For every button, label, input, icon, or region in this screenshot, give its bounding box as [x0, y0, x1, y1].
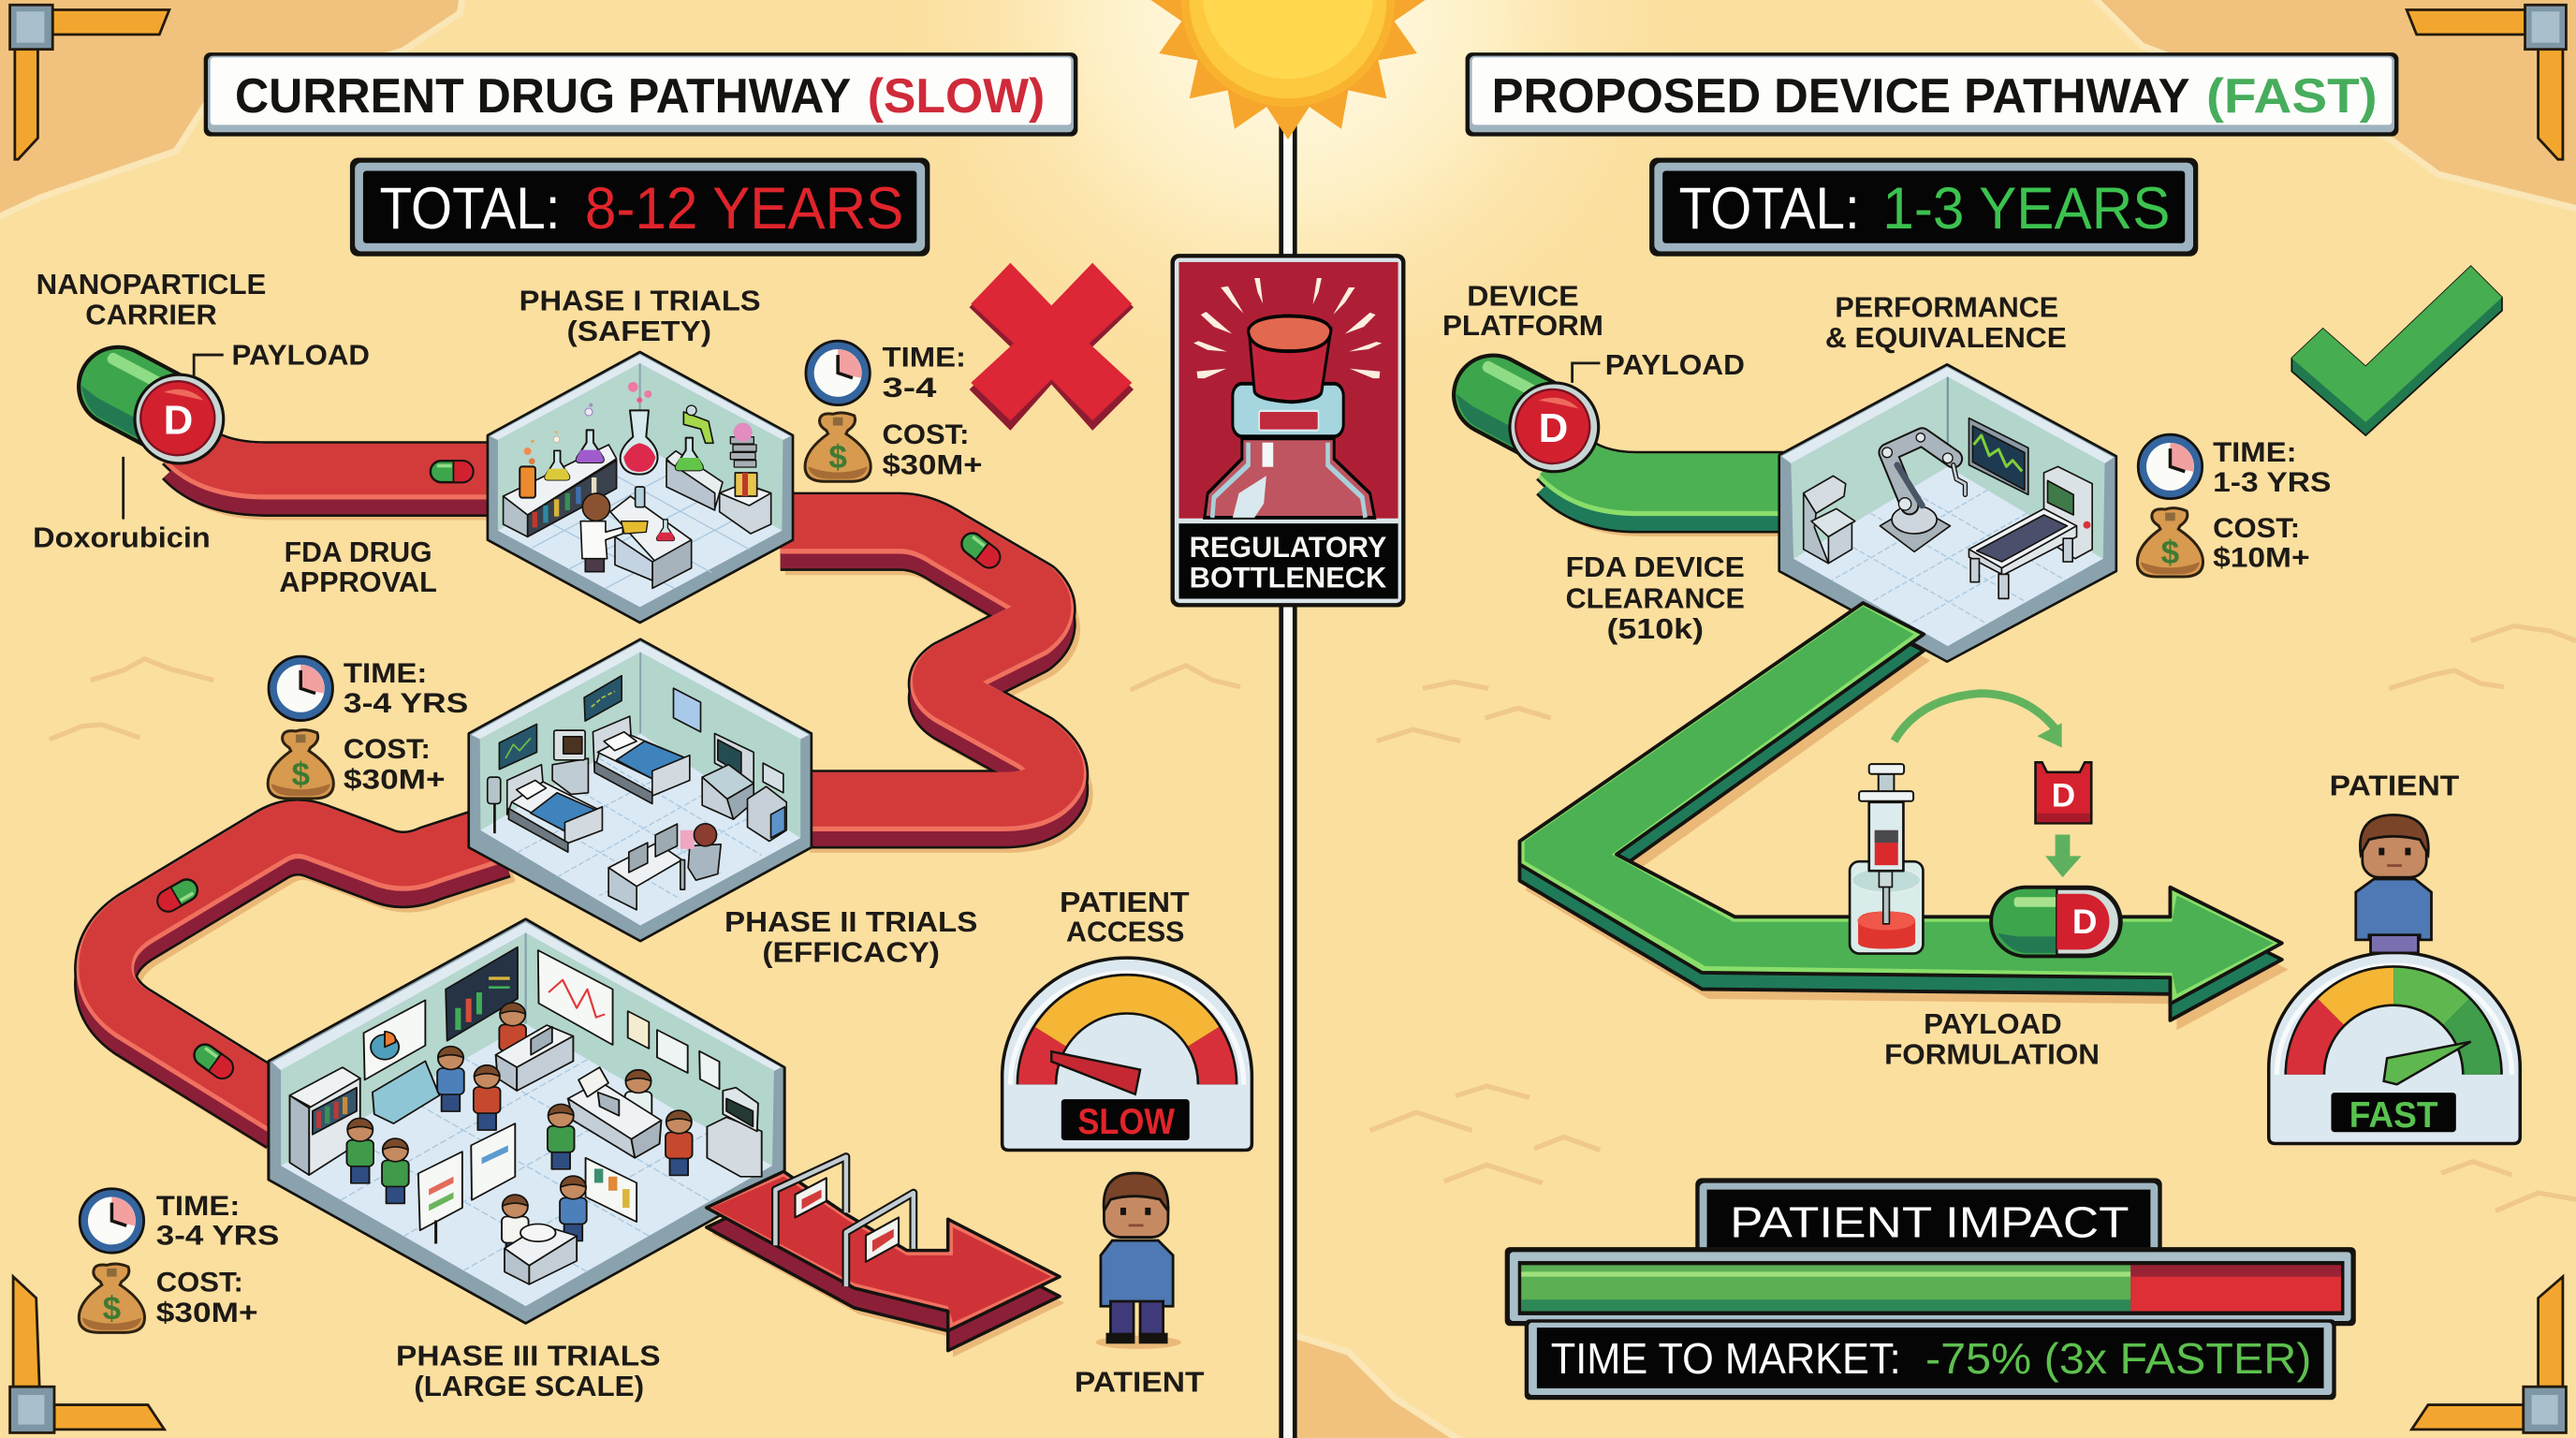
icon: money bag: $ — [103, 1290, 122, 1327]
red pathway track, drug approval to phase I — [184, 441, 501, 492]
icon: money bag — [2137, 508, 2203, 577]
text: total label: TOTAL: — [1679, 176, 1860, 242]
readout: time to market: -75% (3x FASTER) — [1925, 1334, 2311, 1383]
icon: money bag — [268, 730, 333, 799]
label: performance and equivalence: PERFORMANCE — [1835, 291, 2058, 324]
icon: red cross — [970, 263, 1134, 431]
text: cost: COST: — [344, 734, 431, 765]
label: patient left: PATIENT — [1075, 1366, 1205, 1399]
icon: device capsule — [1438, 337, 1614, 487]
text: 8-12 years: 8-12 YEARS — [585, 176, 903, 242]
heading: fast: (FAST) — [2206, 68, 2378, 123]
panel: total drug years — [350, 157, 929, 257]
text: cost: $30M+ — [883, 449, 983, 480]
icon: corner bracket bottom left — [10, 1277, 165, 1432]
stat block: device time and cost — [2137, 434, 2331, 577]
label: payload: PAYLOAD — [232, 339, 370, 372]
label: patient access: ACCESS — [1066, 916, 1184, 948]
text: time — [883, 342, 966, 404]
icon: clock — [80, 1189, 144, 1253]
text: time: TIME: — [883, 342, 966, 373]
icon: patient left — [1096, 1173, 1181, 1349]
readout: time to market — [1525, 1319, 2336, 1400]
panel: lab performance and equivalence — [1779, 364, 2116, 662]
background: sand ripples — [50, 626, 2576, 1211]
panel: patient impact — [1505, 1178, 2356, 1400]
label: payload formulation: PAYLOAD — [1924, 1007, 2062, 1040]
gauge readout: slow: SLOW — [1077, 1102, 1175, 1142]
icon: gate one — [775, 1157, 846, 1245]
label: patient access: PATIENT — [1060, 886, 1190, 918]
icon: clock — [806, 341, 870, 405]
label: performance and equivalence: & EQUIVALENCE — [1825, 321, 2067, 354]
text: time — [2213, 437, 2331, 498]
text: D: D — [2052, 778, 2075, 814]
label: phase II trials: (EFFICACY) — [762, 936, 940, 969]
text: D: D — [2072, 902, 2097, 941]
label: phase I trials: (SAFETY) — [567, 315, 711, 347]
icon: gate two — [846, 1193, 914, 1286]
icon: green check — [2291, 266, 2502, 435]
mini capsules on red track — [154, 461, 1004, 1082]
gauge needle — [1051, 1051, 1140, 1094]
gauge readout: fast: FAST — [2349, 1095, 2438, 1136]
panel: lab phase I trials — [488, 352, 793, 623]
gauge needle — [2384, 1042, 2471, 1084]
gauge: patient access fast — [2269, 952, 2520, 1143]
label: performance and equivalence — [1825, 291, 2067, 354]
text: 1-3 years: 1-3 YEARS — [1882, 176, 2170, 242]
label: payload formulation: FORMULATION — [1884, 1037, 2100, 1070]
stat block: phase I time and cost — [805, 341, 983, 481]
label: fda drug approval — [279, 536, 437, 598]
text: time: TIME: — [344, 658, 427, 689]
text: cost — [2213, 513, 2310, 573]
label: device platform — [1442, 279, 1603, 342]
icon: green arc arrow — [1895, 694, 2062, 748]
label: fda device clearance: FDA DEVICE — [1566, 550, 1745, 583]
icon: money bag: $ — [828, 439, 847, 476]
panel: regulatory bottleneck sign — [1171, 254, 1405, 607]
text: D: D — [1539, 405, 1568, 451]
icon: patient right — [2356, 814, 2431, 953]
icon: corner bracket bottom right — [2411, 1277, 2566, 1432]
icon: doxorubicin tag — [2036, 762, 2091, 823]
text: time — [156, 1191, 279, 1251]
label: phase II trials: PHASE II TRIALS — [724, 905, 977, 938]
label: patient access — [1060, 886, 1190, 948]
label: phase III trials: PHASE III TRIALS — [396, 1339, 661, 1372]
label: fda drug approval: FDA DRUG — [285, 536, 432, 568]
text: time: TIME: — [2213, 437, 2297, 468]
text: cost: $10M+ — [2213, 542, 2310, 573]
readout: time to market: TIME TO MARKET: — [1551, 1334, 1901, 1383]
label: patient right: PATIENT — [2330, 769, 2460, 801]
label: phase I trials: PHASE I TRIALS — [520, 285, 761, 317]
label: fda device clearance: CLEARANCE — [1566, 581, 1745, 614]
icon: main drug capsule — [63, 329, 239, 479]
heading: current drug pathway: CURRENT DRUG PATHWAY — [235, 68, 851, 123]
text: time — [344, 658, 468, 719]
background: sun glow — [855, 0, 1721, 431]
stat block: phase II time and cost — [268, 656, 468, 799]
text: cost: $30M+ — [156, 1298, 258, 1328]
text: total label: TOTAL: — [379, 176, 561, 242]
icon: capsule on green track — [1991, 888, 2121, 956]
divider pole — [1279, 98, 1297, 1438]
label: payload right: PAYLOAD — [1605, 348, 1745, 381]
label: device platform: DEVICE — [1467, 279, 1579, 312]
red pathway arrow to patient — [707, 1157, 1064, 1357]
green pathway track, device clearance to lab — [1560, 454, 1795, 505]
gauge: patient access slow — [1003, 958, 1251, 1151]
label: fda device clearance — [1566, 550, 1745, 645]
label: nanoparticle carrier — [37, 268, 266, 331]
text: cost: COST: — [156, 1267, 243, 1298]
label: payload formulation — [1884, 1007, 2100, 1070]
icon: green down arrow — [2045, 835, 2082, 877]
label: phase II trials — [724, 905, 977, 969]
icon: corner bracket top left — [10, 5, 169, 159]
panel: lab phase III trials — [269, 919, 784, 1323]
heading tab: patient impact — [1695, 1178, 2162, 1264]
label: nanoparticle carrier: NANOPARTICLE — [37, 268, 266, 301]
green pathway arrow to patient — [1519, 603, 2289, 1030]
icon: money bag — [805, 413, 871, 481]
label: phase III trials: (LARGE SCALE) — [414, 1370, 644, 1402]
stat block: phase III time and cost — [79, 1189, 279, 1332]
panel: title proposed device pathway — [1466, 52, 2398, 137]
text: cost — [344, 734, 446, 795]
icon: corked bottle — [1193, 278, 1382, 518]
label: phase I trials — [520, 285, 761, 347]
text: time: 3-4 — [883, 373, 937, 404]
callout lines: doxorubicin and payload — [124, 355, 1600, 520]
text: cost — [883, 419, 983, 480]
label: nanoparticle carrier: CARRIER — [85, 299, 217, 331]
text: cost — [156, 1267, 258, 1328]
text: D: D — [164, 397, 193, 443]
icon: clock — [269, 656, 332, 721]
panel: title current drug pathway — [204, 52, 1077, 137]
progress bar — [1505, 1247, 2356, 1326]
panel: total device years — [1649, 157, 2198, 257]
text: regulatory: REGULATORY — [1190, 530, 1386, 564]
icon: corner bracket top right — [2407, 5, 2566, 159]
label: fda drug approval: APPROVAL — [279, 565, 437, 598]
label: fda device clearance: (510k) — [1606, 612, 1704, 645]
red pathway track, phase I to phase II — [781, 521, 1061, 822]
label: device platform: PLATFORM — [1442, 309, 1603, 342]
text: cost: COST: — [2213, 513, 2300, 544]
red pathway track, phase II to phase III — [105, 828, 506, 1127]
icon: money bag — [79, 1264, 145, 1332]
text: cost: COST: — [883, 419, 970, 450]
icon: clock — [2138, 434, 2203, 499]
text: time: 1-3 YRS — [2213, 467, 2331, 498]
label: doxorubicin: Doxorubicin — [33, 521, 211, 553]
text: time: 3-4 YRS — [156, 1220, 279, 1251]
icon: money bag: $ — [2161, 535, 2180, 571]
heading: proposed device pathway: PROPOSED DEVICE PATHWAY — [1492, 68, 2190, 123]
text: bottleneck: BOTTLENECK — [1190, 560, 1386, 594]
icon: sun — [1149, 0, 1427, 139]
gauge readout: fast — [2331, 1093, 2456, 1136]
icon: money bag: $ — [291, 756, 310, 793]
text: cost: $30M+ — [344, 764, 446, 795]
text: time: 3-4 YRS — [344, 688, 468, 719]
text: time: TIME: — [156, 1191, 240, 1222]
panel: lab phase II trials — [469, 639, 812, 941]
label: phase III trials — [396, 1339, 661, 1402]
heading tab: patient impact: PATIENT IMPACT — [1730, 1198, 2130, 1247]
icon: syringe and vial — [1850, 764, 1923, 954]
heading: slow: (SLOW) — [868, 68, 1045, 123]
